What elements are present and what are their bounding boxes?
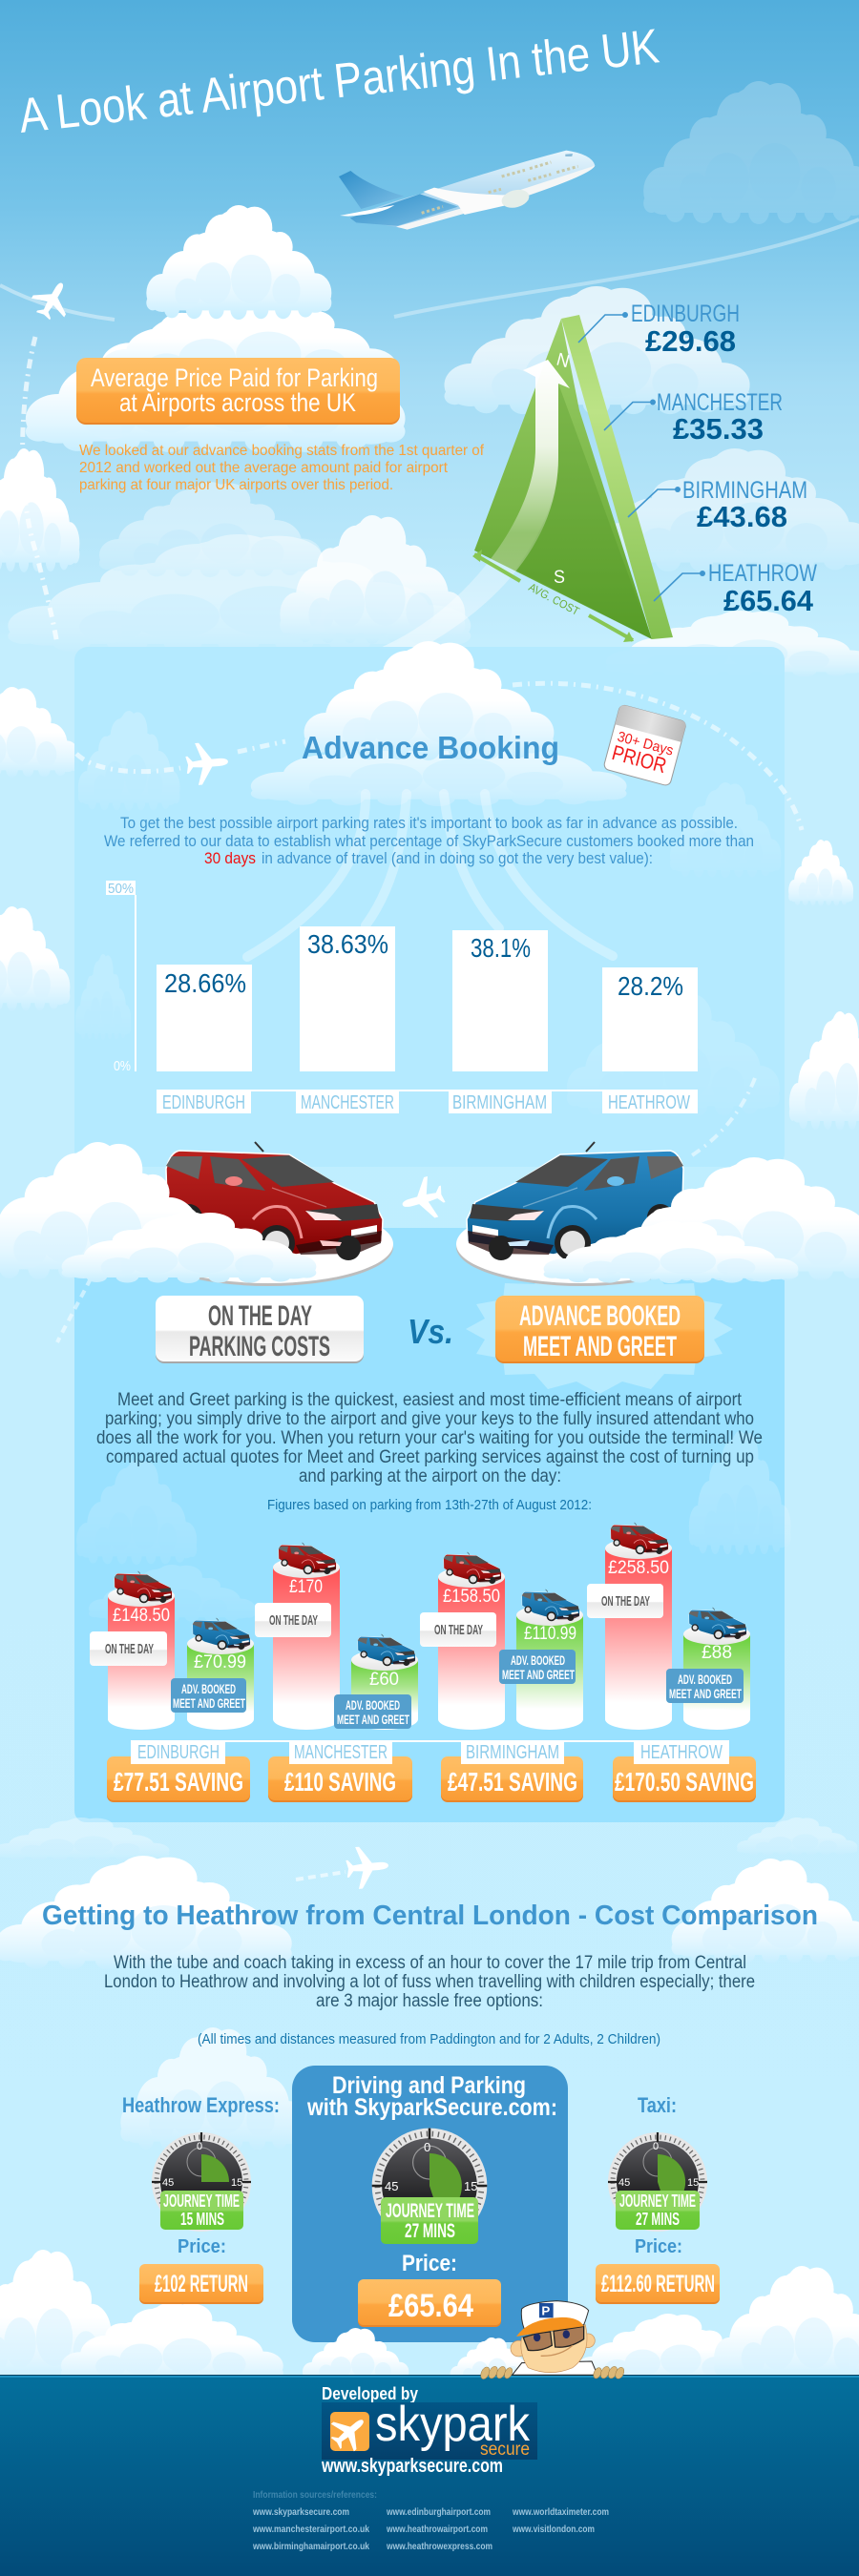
gauge: driving 27 mins: JOURNEY TIME	[386, 2200, 474, 2222]
gauge: driving 27 mins	[372, 2129, 487, 2244]
cylinder: Edinburgh advance	[187, 1618, 254, 1730]
panel: driving and parking: Price:	[402, 2251, 457, 2276]
small white plane with dotted trail, top left	[23, 274, 78, 645]
gauge: driving 27 mins: 15	[464, 2179, 477, 2193]
text: cost comparison intro: London to Heathrow and involving a lot of fuss when travelling with children especially; there	[104, 1972, 755, 1992]
chart: cost triangle	[378, 315, 673, 649]
mascot: parking attendant	[479, 2301, 626, 2380]
callout: average price heading: Average Price Paid for Parking	[91, 364, 378, 392]
label: Edinburgh: EDINBURGH	[631, 301, 740, 327]
tags: advance booked: MEET AND GREET	[502, 1667, 575, 1682]
logo: skypark secure: secure	[480, 2440, 530, 2460]
bar: Manchester: MANCHESTER	[301, 1092, 394, 1113]
button: advance booked meet and greet	[495, 1296, 704, 1363]
label: Manchester: MANCHESTER	[657, 389, 783, 416]
text: meet and greet description: and parking at the airport on the day:	[299, 1466, 561, 1486]
gauge: taxi 27 mins: 15	[687, 2177, 699, 2189]
chart: cost triangle: AVG. COST	[527, 580, 582, 618]
clouds along bottom	[0, 2250, 859, 2385]
bar: Birmingham: BIRMINGHAM	[452, 1092, 547, 1113]
callout: average price heading: at Airports across the UK	[119, 388, 356, 417]
cylinder: Edinburgh on the day: £148.50	[113, 1606, 170, 1626]
gauge: heathrow express 15 mins: 0	[197, 2141, 202, 2152]
background clouds and contrails	[0, 81, 859, 1131]
cylinder: Birmingham advance: £110.99	[524, 1624, 576, 1644]
bar chart: percentage booked 30+ days prior: 0%	[114, 1058, 131, 1074]
saving: Birmingham: £47.51 SAVING	[448, 1767, 577, 1797]
label: Manchester: £35.33	[673, 412, 764, 446]
saving: Manchester: MANCHESTER	[294, 1742, 388, 1763]
text: meet and greet description	[96, 1390, 763, 1486]
footer background	[0, 2375, 859, 2576]
cylinder: Heathrow on the day: £258.50	[608, 1558, 669, 1578]
price: driving	[358, 2279, 501, 2327]
tags: advance booked: MEET AND GREET	[337, 1712, 409, 1727]
price: heathrow express	[139, 2264, 263, 2304]
icon: blue car on platform	[456, 1142, 706, 1286]
text: advance booking intro: We referred to our data to establish what percentage of SkyParkSecure customers booked more than	[104, 832, 754, 850]
starburst behind advance button	[466, 1264, 733, 1394]
price: taxi: £112.60 RETURN	[601, 2271, 715, 2297]
saving: Heathrow	[613, 1741, 756, 1802]
gauge: taxi 27 mins: 45	[618, 2177, 630, 2189]
clouds: cost comparison section	[0, 1818, 859, 2151]
cylinder: Birmingham on the day: £158.50	[443, 1587, 500, 1607]
cylinder: Manchester on the day	[273, 1543, 340, 1730]
option: heathrow express	[122, 2093, 280, 2304]
footer: developed by: Developed by	[322, 2384, 418, 2403]
footer: information sources: www.skyparksecure.com	[252, 2507, 349, 2518]
label: Edinburgh: £29.68	[645, 324, 736, 358]
bar: Edinburgh: 28.66%	[164, 968, 246, 998]
icon: red car on platform	[143, 1142, 393, 1286]
text: advance booking intro: in advance of travel (and in doing so got the very best value):	[262, 849, 653, 867]
button: on the day parking costs: ON THE DAY	[208, 1300, 312, 1332]
logo: skypark secure	[322, 2397, 537, 2460]
gauge: driving 27 mins: 45	[385, 2179, 398, 2193]
text: cost comparison intro: are 3 major hassle free options:	[316, 1991, 543, 2011]
cylinder: Manchester advance: £60	[369, 1670, 399, 1690]
tags: advance booked: ADV. BOOKED	[181, 1681, 236, 1696]
saving: Heathrow: £170.50 SAVING	[615, 1767, 754, 1797]
bar chart: percentage booked 30+ days prior: 50%	[108, 881, 134, 897]
tags: advance booked: ADV. BOOKED	[511, 1652, 565, 1668]
savings row	[107, 1741, 756, 1802]
button: advance booked meet and greet: MEET AND GREET	[523, 1331, 677, 1362]
footer: information sources: www.birminghamairport.co.uk	[252, 2542, 369, 2552]
tags: advance booked: MEET AND GREET	[669, 1686, 742, 1701]
heading: advance booking: Advance Booking	[302, 730, 559, 765]
intro text	[79, 443, 485, 493]
option: taxi: Taxi:	[638, 2093, 677, 2117]
text: advance booking intro	[104, 814, 754, 867]
option: taxi	[596, 2093, 720, 2304]
saving: Manchester: £110 SAVING	[284, 1767, 396, 1797]
cloud trails down to bars	[247, 794, 613, 957]
icon: calendar 30+ days prior: PRIOR	[610, 740, 669, 778]
bar: Manchester: 38.63%	[307, 929, 388, 959]
title: A Look at Airport Parking In the UK	[16, 18, 661, 143]
gauge: taxi 27 mins: 27 MINS	[636, 2210, 680, 2229]
gauge: driving 27 mins: 27 MINS	[405, 2220, 455, 2242]
saving: Birmingham	[441, 1741, 583, 1802]
footer: information sources: www.visitlondon.com	[512, 2524, 595, 2535]
label: Heathrow	[654, 560, 817, 617]
icon: white plane between cars	[397, 1174, 449, 1225]
cylinder: Birmingham advance	[516, 1589, 583, 1730]
bar: Heathrow: 28.2%	[618, 971, 683, 1001]
footer: information sources: www.heathrowexpress.com	[386, 2542, 492, 2552]
tags: advance booked: MEET AND GREET	[173, 1695, 245, 1711]
label: Edinburgh	[578, 301, 740, 358]
footer: information sources: www.edinburghairport.com	[386, 2507, 491, 2518]
label: Heathrow: HEATHROW	[708, 560, 817, 587]
footer: information sources: www.worldtaximeter.com	[512, 2507, 609, 2518]
label: Birmingham	[628, 477, 807, 533]
text: advance booking intro: To get the best possible airport parking rates it's important to book as far in advance as possible.	[120, 814, 738, 832]
gauge: taxi 27 mins: 0	[653, 2141, 659, 2152]
cloud behind advance booking heading	[251, 641, 627, 806]
panel: driving and parking: with SkyparkSecure.com:	[306, 2094, 557, 2121]
chart: cost triangle: S	[554, 568, 565, 588]
note: figures dates: Figures based on parking from 13th-27th of August 2012:	[267, 1497, 592, 1513]
cylinder: Heathrow advance	[683, 1608, 750, 1730]
gauge: taxi 27 mins	[608, 2132, 707, 2232]
versus label: Vs.	[408, 1312, 453, 1351]
intro text: We looked at our advance booking stats from the 1st quarter of	[79, 443, 485, 459]
tags: advance booked	[171, 1650, 744, 1729]
gauge: heathrow express 15 mins	[152, 2132, 251, 2232]
tags: advance booked: ADV. BOOKED	[678, 1672, 732, 1687]
price: heathrow express: £102 RETURN	[155, 2271, 248, 2297]
label: Heathrow: £65.64	[723, 584, 814, 617]
note: measurement basis: (All times and distances measured from Paddington and for 2 Adults, 2 Children)	[198, 2031, 660, 2047]
icon: white plane, cost comparison	[296, 1844, 390, 1890]
tags: on the day: ON THE DAY	[269, 1612, 318, 1629]
saving: Heathrow: HEATHROW	[640, 1742, 723, 1763]
gauge: heathrow express 15 mins: 15 MINS	[180, 2210, 224, 2229]
bar: Birmingham	[449, 930, 552, 1113]
gauge: heathrow express 15 mins: 45	[162, 2177, 174, 2189]
mascot: parking attendant: P	[541, 2304, 550, 2318]
heading: cost comparison: Getting to Heathrow from Central London - Cost Comparison	[42, 1901, 818, 1931]
bar: Manchester	[296, 926, 399, 1113]
bar: Birmingham: 38.1%	[471, 933, 531, 963]
price: taxi	[596, 2264, 720, 2304]
footer: website: www.skyparksecure.com	[321, 2456, 503, 2477]
cylinder: Edinburgh on the day	[108, 1571, 175, 1730]
cylinder: Heathrow on the day	[605, 1523, 672, 1730]
clouds over cars	[0, 1142, 859, 1283]
bar: Edinburgh	[157, 965, 252, 1113]
footer: information sources: Information sources/references:	[253, 2490, 377, 2501]
bar: Heathrow	[602, 967, 698, 1113]
text: cost comparison intro: With the tube and coach taking in excess of an hour to cover the 17 mile trip from Central	[114, 1953, 746, 1973]
icon: calendar 30+ days prior: 30+ Days	[616, 729, 675, 759]
saving: Edinburgh: EDINBURGH	[137, 1742, 220, 1763]
intro text: parking at four major UK airports over this period.	[79, 477, 393, 493]
footer: information sources	[252, 2490, 609, 2552]
button: on the day parking costs: PARKING COSTS	[189, 1331, 330, 1362]
cylinder: Manchester advance	[351, 1634, 418, 1730]
tags: on the day: ON THE DAY	[434, 1622, 483, 1638]
panel: driving and parking: Driving and Parking	[332, 2072, 526, 2099]
option: heathrow express: Price:	[178, 2236, 226, 2257]
saving: Manchester	[268, 1741, 412, 1802]
icon: calendar 30+ days prior	[603, 704, 687, 786]
text: meet and greet description: parking; you simply drive to the airport and give your keys to the fully insured attendant who	[105, 1409, 754, 1429]
gauge: heathrow express 15 mins: JOURNEY TIME	[163, 2192, 240, 2211]
bar chart: percentage booked 30+ days prior	[106, 881, 698, 1113]
price: driving: £65.64	[388, 2288, 473, 2324]
panel clouds and dotted trails	[57, 683, 802, 1622]
cost labels	[578, 301, 817, 617]
button: on the day parking costs	[156, 1296, 364, 1363]
button: advance booked meet and greet: ADVANCE BOOKED	[519, 1300, 681, 1332]
label: Birmingham: £43.68	[697, 500, 787, 533]
option: taxi: Price:	[635, 2236, 682, 2257]
tags: advance booked: ADV. BOOKED	[346, 1697, 400, 1713]
label: Manchester	[604, 389, 783, 446]
cylinder: Heathrow advance: £88	[702, 1643, 732, 1663]
bar: Heathrow: HEATHROW	[608, 1092, 690, 1113]
cylinder: Birmingham on the day	[438, 1552, 505, 1730]
text: meet and greet description: compared actual quotes for Meet and Greet parking services against the cost of turning up	[106, 1447, 754, 1467]
text: meet and greet description: Meet and Greet parking is the quickest, easiest and most time-efficient means of airport	[117, 1390, 743, 1410]
text: advance booking intro: 30 days	[204, 849, 256, 867]
icon: airliner	[339, 151, 595, 230]
footer: information sources: www.heathrowairport.com	[386, 2524, 488, 2535]
logo: skypark secure: skypark	[375, 2397, 531, 2452]
tags: on the day: ON THE DAY	[105, 1641, 154, 1657]
bar: Edinburgh: EDINBURGH	[162, 1092, 245, 1113]
intro text: 2012 and worked out the average amount paid for airport	[79, 460, 449, 476]
callout: average price heading	[76, 358, 400, 425]
footer: information sources: www.manchesterairport.co.uk	[252, 2524, 369, 2535]
chart: cost triangle: N	[555, 350, 572, 372]
icon: white plane, advance booking	[184, 740, 230, 786]
cylinder: Edinburgh advance: £70.99	[194, 1652, 246, 1672]
gauge: taxi 27 mins: JOURNEY TIME	[619, 2192, 696, 2211]
gauge: driving 27 mins: 0	[424, 2140, 430, 2154]
panel: driving and parking	[292, 2066, 568, 2342]
saving: Edinburgh: £77.51 SAVING	[114, 1767, 243, 1797]
gauge: heathrow express 15 mins: 15	[231, 2177, 242, 2189]
cylinder: Manchester on the day: £170	[289, 1577, 323, 1597]
text: meet and greet description: does all the work for you. When you return your car's waiting for you outside the terminal! We	[96, 1428, 763, 1448]
option: heathrow express: Heathrow Express:	[122, 2093, 280, 2117]
label: Birmingham: BIRMINGHAM	[682, 477, 807, 504]
saving: Edinburgh	[107, 1741, 250, 1802]
saving: Birmingham: BIRMINGHAM	[466, 1742, 559, 1763]
tags: on the day	[90, 1584, 663, 1666]
panel: advance booking background	[74, 647, 785, 1822]
chart: on the day vs advance cylinders	[90, 1523, 750, 1730]
text: cost comparison intro	[104, 1953, 755, 2011]
tags: on the day: ON THE DAY	[601, 1593, 650, 1610]
